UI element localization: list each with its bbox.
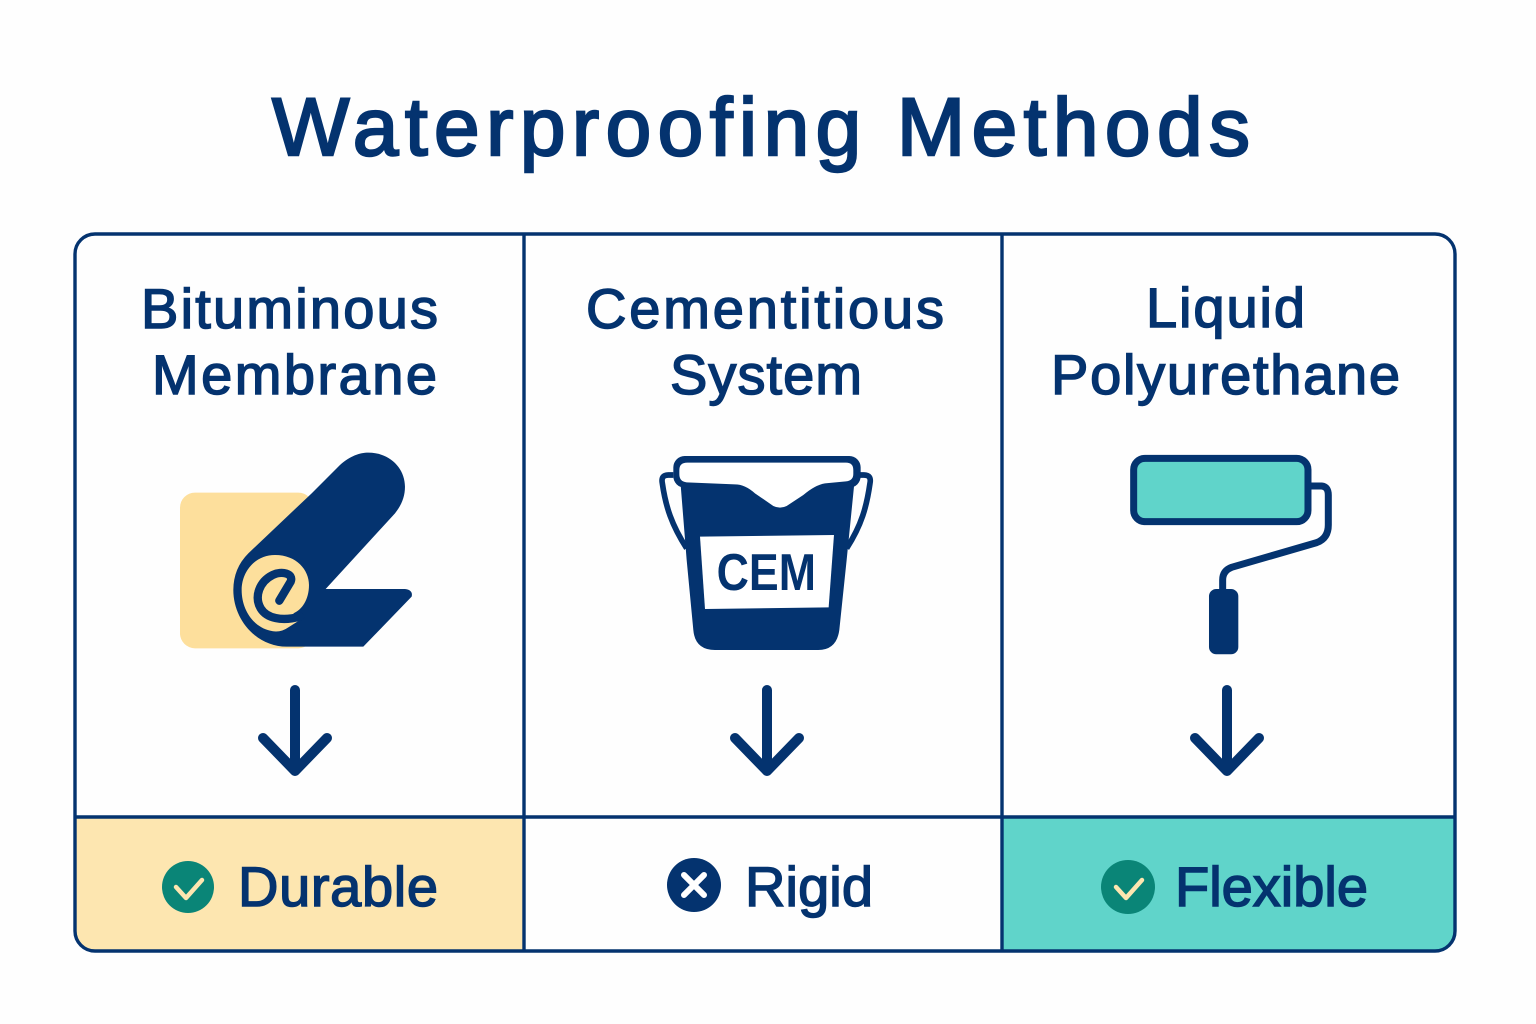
panel: liquid polyurethane xyxy=(1051,276,1400,918)
heading: Liquid xyxy=(1146,276,1305,339)
heading xyxy=(141,277,438,406)
status: rigid: Rigid xyxy=(745,855,873,918)
heading: Bituminous xyxy=(141,277,438,340)
heading xyxy=(586,277,944,406)
status: rigid xyxy=(667,855,873,918)
title: Waterproofing Methods xyxy=(272,82,1250,173)
arrow xyxy=(735,690,799,771)
panel: bituminous membrane xyxy=(141,277,438,918)
icon: cement bucket: CEM xyxy=(717,543,816,601)
status fill: durable xyxy=(75,818,524,950)
table frame xyxy=(75,234,1455,951)
icon: paint roller xyxy=(1134,458,1328,654)
heading: Membrane xyxy=(152,343,437,406)
heading xyxy=(1051,276,1400,406)
heading: System xyxy=(670,343,862,406)
heading: Cementitious xyxy=(586,277,944,340)
icon: membrane roll xyxy=(180,453,412,648)
status fill: flexible xyxy=(1002,818,1455,950)
arrow xyxy=(1195,690,1259,771)
icon: cement bucket xyxy=(662,456,870,650)
status: durable: Durable xyxy=(238,855,438,918)
heading: Polyurethane xyxy=(1051,343,1400,406)
arrow xyxy=(263,690,327,771)
panel: cementitious system xyxy=(586,277,944,918)
status: flexible: Flexible xyxy=(1175,855,1368,918)
comparison table xyxy=(75,234,1455,951)
